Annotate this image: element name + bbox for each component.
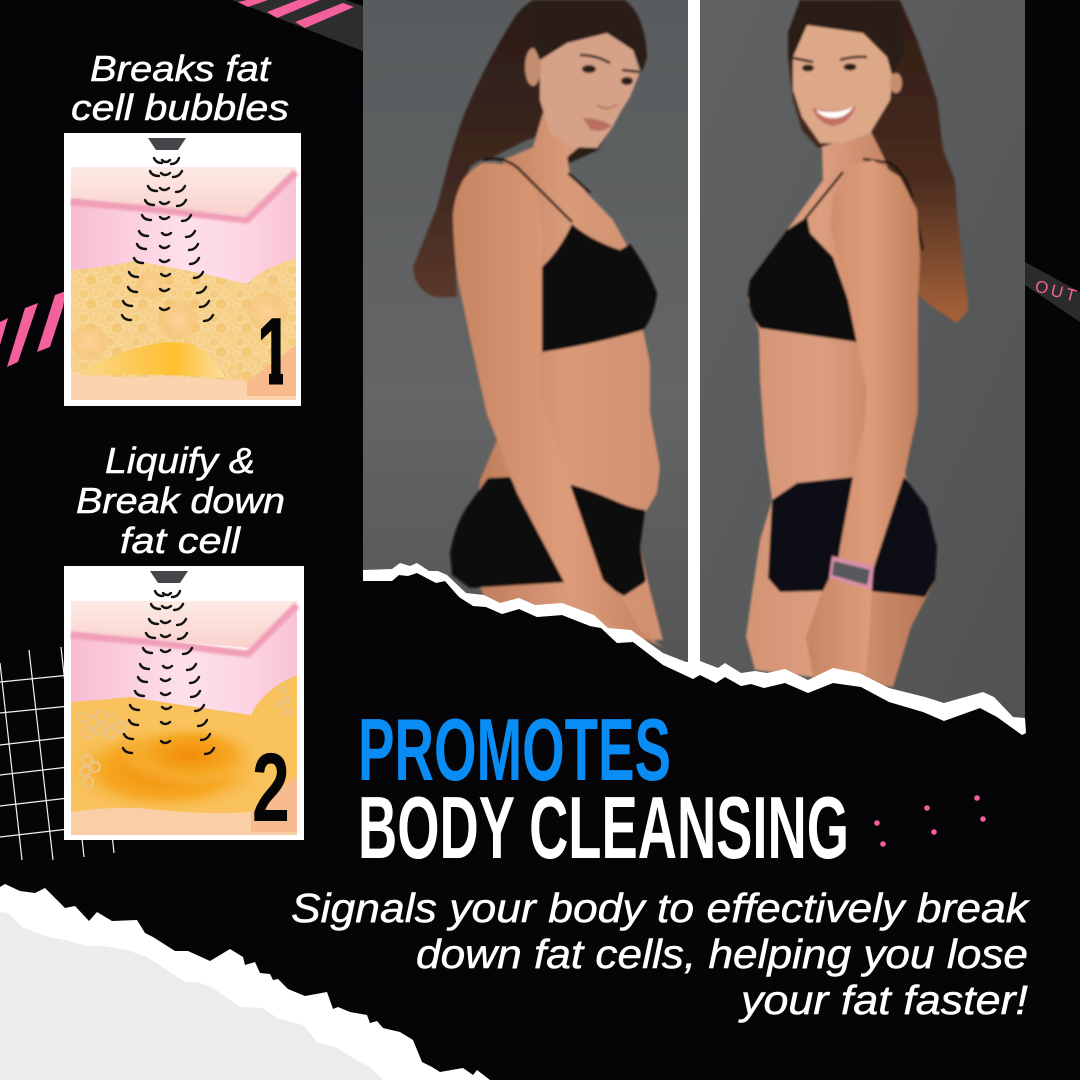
fat layer with bubbles [71,258,296,385]
hair under chin [565,130,610,165]
decorative OUT band [1025,262,1080,322]
smile [812,106,856,126]
arm [453,163,663,647]
eyes [802,64,814,72]
eyes [582,65,596,73]
bra [748,217,857,342]
hair back [413,0,560,297]
caption: step 2: fat cell [120,520,241,561]
remaining fat cell outlines [77,687,291,787]
decorative stripes: left [0,291,66,367]
liquified orange pool [76,728,254,809]
decorative striped band: top [232,0,375,58]
photo: before [363,0,688,665]
underwear [768,477,937,597]
caption: step 2: Liquify & [105,440,255,481]
hair [788,0,968,323]
heading: PROMOTES [358,700,671,799]
photo: after [700,0,1025,735]
teeth [816,107,853,118]
heading [358,700,849,877]
lips [583,118,612,131]
diagram: step 1 fat cell bubbles [64,133,301,406]
ultrasound waves [122,158,213,321]
torn edge: photo bottom [360,563,1026,900]
caption: step 1 [71,48,289,128]
diagram: step 2 liquified fat [60,566,304,840]
ear [525,48,541,86]
lower tissue layer [71,775,297,835]
hair top [533,0,647,72]
number 1: 1 [257,299,292,405]
divider: white bar [688,0,700,670]
decorative pink dots [874,795,986,847]
ultrasound emitter [150,571,188,583]
large fat bubbles [71,271,288,379]
caption: step 1: Breaks fat [90,48,272,89]
torn paper: bottom left [0,884,490,1080]
skin band [71,172,296,220]
fat layer [71,675,297,820]
head [540,33,640,148]
ultrasound waves [123,591,214,754]
body text [291,885,1031,1023]
ultrasound emitter [148,138,186,150]
decorative OUT band: OUT [1033,277,1080,306]
dermis layer [71,172,296,290]
eyebrows [580,55,640,72]
nose shadow [597,104,618,108]
ear [890,73,902,93]
head [793,25,893,143]
torso and legs [746,130,935,687]
upper skin layer [71,167,296,216]
watch face [832,561,870,585]
yellow liquid blob [78,342,226,378]
watch band [829,556,874,590]
bra straps [805,159,923,250]
number 2: 2 [252,733,290,842]
caption: step 2: Break down [76,480,285,521]
underwear [450,477,646,596]
decorative white grid [0,647,120,860]
body text: Signals your body to effectively break [291,885,1031,931]
body text: down fat cells, helping you lose [416,931,1028,977]
figure: after woman [746,0,968,687]
arm [806,160,920,677]
eyebrows [793,57,867,62]
figure: before woman [413,0,663,647]
dermis layer [71,606,297,720]
bra [542,224,657,352]
torso [470,113,663,640]
hair top [788,0,905,75]
lower tissue layer [71,350,296,400]
skin band [71,605,297,654]
caption: step 1: cell bubbles [71,87,289,128]
caption: step 2 [76,440,285,561]
body text: your fat faster! [738,977,1028,1023]
upper skin layer [71,601,297,648]
bra straps [483,159,590,222]
